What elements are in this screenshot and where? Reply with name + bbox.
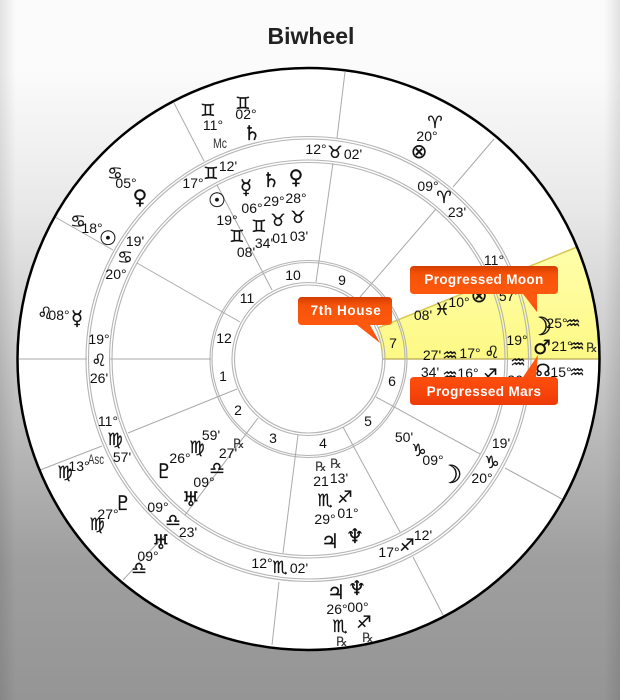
aquarius ring upper label: 19° (506, 332, 528, 348)
inner Sun placement (208, 188, 255, 260)
callout: Progressed Mars: Progressed Mars (427, 384, 541, 399)
house numbers: 5 (364, 413, 372, 429)
inner Mercury placement: 06° (241, 200, 263, 216)
outer Venus placement: ♋ (107, 164, 123, 184)
outer Pluto placement: ♇ (114, 491, 132, 515)
outer Neptune placement: ♆ (348, 576, 366, 600)
callout: 7th House (298, 297, 392, 343)
sagittarius ring label: 17° (378, 544, 400, 560)
highlighted 7th house sector (378, 246, 598, 360)
progressed Moon placement (530, 312, 581, 341)
inner Neptune placement: 01° (337, 505, 359, 521)
outer Node placement: 15° (550, 364, 572, 380)
progressed Moon placement: ♒ (565, 314, 581, 334)
inner Pluto placement: ♇ (155, 459, 173, 483)
inner Jupiter placement: 21 (313, 473, 329, 489)
inner Pluto placement (155, 427, 220, 483)
capricorn ring label: 20° (471, 470, 493, 486)
inner Jupiter placement: ℞ (315, 460, 327, 475)
sagittarius ring label (378, 527, 432, 560)
aquarius ring upper label: 57' (499, 288, 517, 304)
inner node placement in seventh house: ♌ (484, 343, 500, 363)
inner Sun placement: 08' (237, 244, 255, 260)
inner south node placement (421, 364, 498, 386)
taurus ring label (305, 141, 362, 163)
outer Sun placement: 18° (81, 220, 103, 236)
inner pisces placement (414, 283, 487, 323)
outer Node placement (535, 361, 585, 383)
outer Pluto placement: ♍ (89, 515, 105, 535)
inner south node placement: ♐ (482, 366, 498, 386)
inner Venus placement: ♉ (290, 208, 306, 228)
outer Ascendant placement: Asc (88, 451, 104, 467)
aries ring label: 23' (448, 204, 466, 220)
outer Jupiter placement (326, 580, 348, 650)
aries ring label: 09° (417, 178, 439, 194)
outer Ascendant placement: ♍ (57, 463, 73, 483)
inner Pluto placement: ♍ (189, 438, 205, 458)
progressed Mars placement (533, 335, 598, 359)
aquarius ring lower label: 26 (507, 372, 523, 388)
Midheaven outer placement (200, 101, 227, 151)
outer Node placement: ☊ (535, 361, 551, 381)
inner Moon placement: 09° (422, 452, 444, 468)
house numbers: 11 (240, 290, 254, 306)
Midheaven outer placement: Mc (213, 135, 227, 151)
midheaven ring label: ♊ (203, 164, 219, 184)
ascendant ring label: ♌ (91, 351, 107, 371)
virgo ring label: ♍ (107, 430, 123, 450)
house numbers: 2 (234, 402, 242, 418)
inner Mercury placement: ☿ (240, 175, 252, 199)
outer Node placement: ♒ (569, 363, 585, 383)
inner Jupiter placement (313, 460, 339, 553)
outer Mercury placement: ♌ (37, 304, 53, 324)
house numbers: 1 (219, 368, 227, 384)
aquarius ring upper label: 11° (484, 252, 504, 268)
inner pisces placement: 08' (414, 307, 432, 323)
inner Neptune placement: ♐ (337, 488, 353, 508)
inner Uranus placement: 27' (219, 445, 237, 461)
inner Pluto placement: 26° (169, 450, 191, 466)
inner Venus placement: 28° (285, 190, 307, 206)
capricorn ring label (471, 435, 510, 486)
inner Moon placement: ☽ (440, 460, 462, 489)
inner Saturn placement: 29° (263, 193, 285, 209)
scorpio ring label: 12° (251, 555, 273, 571)
aquarius ring lower label: ♒ (510, 353, 526, 373)
outer Sun placement: ♋ (70, 212, 86, 232)
house numbers: 12 (216, 330, 232, 346)
sagittarius ring label: 12' (414, 527, 432, 543)
inner Venus placement: ♀ (289, 165, 303, 189)
taurus ring label: 02' (344, 146, 362, 162)
outer Saturn placement: ♄ (243, 121, 261, 145)
house numbers (216, 267, 397, 451)
outer Venus placement (107, 164, 147, 209)
inner Uranus placement: 09° (193, 474, 215, 490)
capricorn ring label: 19' (492, 435, 510, 451)
outer Neptune placement (347, 576, 374, 646)
virgo ring label (98, 413, 131, 465)
inner Jupiter placement: ♏ (317, 491, 333, 511)
outer part of fortune placement (411, 113, 443, 163)
inner Neptune placement: ℞ (330, 457, 342, 472)
outer Jupiter placement: ♏ (332, 617, 348, 637)
house numbers: 4 (319, 435, 327, 451)
outer Saturn placement (235, 94, 261, 145)
virgo ring label: 57' (113, 449, 131, 465)
inner node placement in seventh house (423, 343, 500, 366)
outer Venus placement: ♀ (133, 185, 147, 209)
inner Saturn placement (262, 168, 288, 246)
outer part of fortune placement: 20° (416, 128, 438, 144)
inner Sun placement: 19° (216, 212, 238, 228)
outer Uranus placement: ♅ (152, 530, 170, 554)
outer Neptune placement: ♐ (356, 613, 372, 633)
outer Mercury placement: 08° (48, 307, 70, 323)
sagittarius ring label: ♐ (399, 536, 415, 556)
inner Jupiter placement: ♃ (321, 529, 339, 553)
aries ring label (417, 178, 466, 220)
ring label cancer: 20° (105, 266, 127, 282)
callout: Progressed Moon (410, 266, 558, 312)
midheaven ring label (182, 158, 237, 191)
aries ring label: ♈ (436, 188, 452, 208)
inner south node placement: ♒ (442, 366, 458, 386)
title: Biwheel (268, 23, 354, 49)
house numbers: 9 (338, 272, 346, 288)
inner node placement in seventh house: 17° (459, 345, 481, 361)
callout: 7th House: 7th House (311, 303, 381, 318)
virgo ring label: 11° (98, 413, 118, 429)
inner pisces placement: 10° (448, 294, 470, 310)
taurus ring label: ♉ (327, 143, 343, 163)
inner Moon placement (395, 429, 462, 489)
outer Mercury placement: ☿ (71, 306, 83, 330)
inner Saturn placement: 01 (272, 230, 288, 246)
progressed Moon placement: 25° (546, 315, 568, 331)
inner Moon placement: ♑ (411, 441, 427, 461)
wheel rings (86, 136, 531, 582)
aquarius ring lower label (507, 353, 526, 388)
inner Venus placement (285, 165, 308, 244)
callout: Progressed Mars (410, 355, 558, 405)
outer Uranus placement: ♎ (131, 559, 147, 579)
progressed Mars placement: 21° (551, 338, 573, 354)
inner Mercury placement (240, 175, 273, 251)
inner Uranus placement (182, 437, 245, 511)
inner Uranus placement: ♅ (182, 487, 200, 511)
libra ring label: ♎ (165, 511, 181, 531)
midheaven ring label: 17° (182, 175, 204, 191)
house numbers: 7 (389, 335, 397, 351)
progressed Mars placement: ♒ (569, 337, 585, 357)
outer circle border (18, 68, 600, 650)
outer Uranus placement (131, 530, 170, 579)
inner Uranus placement: ℞ (233, 437, 245, 452)
house numbers: 6 (388, 373, 396, 389)
ascendant ring label: 26' (90, 370, 108, 386)
inner Venus placement: 03' (290, 228, 308, 244)
inner Sun placement: ☉ (208, 188, 226, 212)
outer Pluto placement (89, 491, 132, 535)
inner Neptune placement: ♆ (346, 524, 364, 548)
inner Sun placement: ♊ (229, 227, 245, 247)
ring label cancer: ♋ (117, 248, 133, 268)
scorpio ring label: 02' (290, 560, 308, 576)
scorpio ring label (251, 555, 308, 578)
outer Venus placement: 05° (115, 175, 137, 191)
outer Ascendant placement: 13° (68, 458, 90, 474)
progressed Moon placement: ☽ (530, 312, 552, 341)
house cusp lines (18, 72, 562, 645)
outer Ascendant placement (57, 451, 104, 483)
outer part of fortune placement: ⊗ (411, 139, 427, 163)
ascendant ring label: 19° (88, 331, 110, 347)
outer Pluto placement: 27° (97, 506, 119, 522)
outer Jupiter placement: 26° (326, 601, 348, 617)
ascendant ring label (88, 331, 110, 386)
Midheaven outer placement: 11° (203, 117, 223, 133)
taurus ring label: 12° (305, 141, 327, 157)
outer Sun placement: ☉ (99, 226, 117, 250)
outer Saturn placement: ♊ (235, 94, 251, 114)
inner Mercury placement: ♊ (251, 217, 267, 237)
outer Neptune placement: ℞ (362, 631, 374, 646)
inner pisces placement: ⊗ (471, 283, 487, 307)
house numbers: 3 (269, 430, 277, 446)
midheaven ring label: 12' (219, 158, 237, 174)
progressed Mars placement: ℞ (586, 341, 598, 356)
inner south node placement: 16° (457, 365, 479, 381)
inner Jupiter placement: 29° (314, 511, 336, 527)
inner Saturn placement: ♉ (270, 211, 286, 231)
inner node placement in seventh house: 27' (423, 347, 441, 363)
Midheaven outer placement: ♊ (200, 101, 216, 121)
libra ring label: 23' (179, 524, 197, 540)
outer Neptune placement: 00° (347, 599, 369, 615)
inner south node placement: 34' (421, 364, 439, 380)
outer Jupiter placement: ℞ (336, 635, 348, 650)
inner Neptune placement: 13' (330, 470, 348, 486)
inner Mercury placement: 34' (255, 235, 273, 251)
outer Jupiter placement: ♃ (327, 580, 345, 604)
outer Uranus placement: 09° (137, 548, 159, 564)
ring label cancer: 19' (126, 233, 144, 249)
callout: Progressed Moon: Progressed Moon (424, 272, 544, 287)
outer Saturn placement: 02° (235, 106, 257, 122)
scorpio ring label: ♏ (272, 558, 288, 578)
libra ring label: 09° (147, 499, 169, 515)
progressed Mars placement: ♂ (533, 335, 551, 359)
libra ring label (147, 499, 197, 540)
inner Moon placement: 50' (395, 429, 413, 445)
outer wheel disc (18, 68, 600, 650)
outer Mercury placement (37, 304, 83, 330)
capricorn ring label: ♑ (484, 453, 500, 473)
aquarius ring upper label (484, 252, 528, 348)
ring label cancer (105, 233, 144, 282)
inner Pluto placement: 59' (202, 427, 220, 443)
house numbers: 10 (285, 267, 301, 283)
inner Uranus placement: ♎ (209, 459, 225, 479)
inner Neptune placement (330, 457, 364, 548)
inner pisces placement: ♓ (434, 300, 450, 320)
outer Sun placement (70, 212, 117, 250)
inner node placement in seventh house: ♒ (442, 346, 458, 366)
outer part of fortune placement: ♈ (427, 113, 443, 133)
inner Saturn placement: ♄ (262, 168, 280, 192)
